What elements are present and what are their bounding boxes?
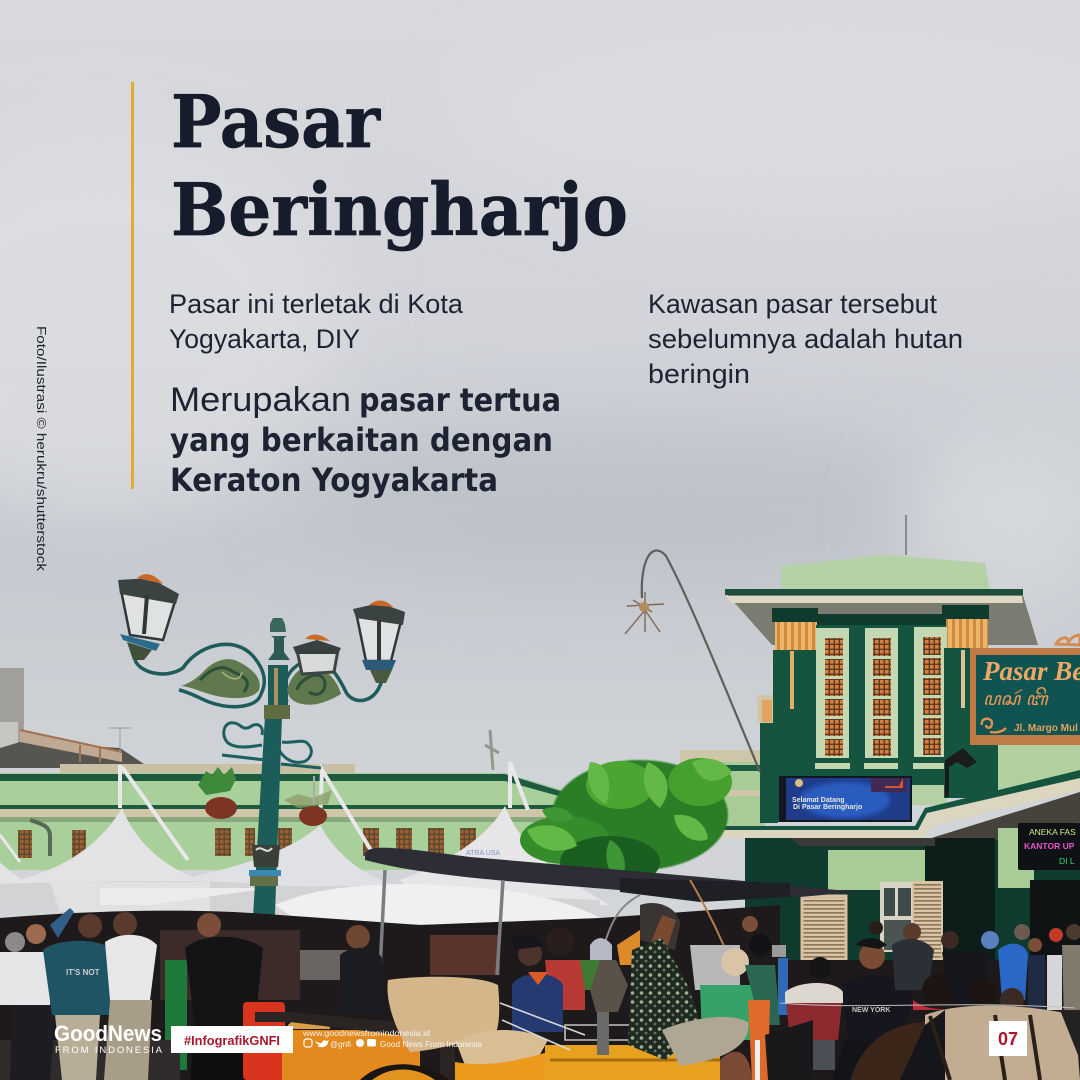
LED shop sign: DI L [1059,856,1075,866]
title: Pasar [171,79,381,164]
logo: GoodNews [54,1021,162,1046]
group of visitors on the left [0,908,157,1080]
page number: 07 [998,1029,1018,1049]
carriage driver [628,903,752,1080]
text block: banyan forest [648,289,963,389]
LED shop sign [1018,823,1080,870]
text block: location: Yogyakarta, DIY [169,324,360,354]
social links: www.goodnewsfromindonesia.id [302,1029,430,1038]
tree [520,758,732,888]
text block: location: Pasar ini terletak di Kota [169,289,464,319]
logo: FROM INDONESIA [55,1045,163,1056]
footer branding [54,1021,1027,1056]
social links [302,1029,483,1049]
social links: @gnfi [330,1040,351,1049]
people [0,908,1080,1080]
market stalls and crowd shadow [0,905,1080,1080]
group of visitors on the left: IT'S NOT [66,968,100,977]
man in black with phone [185,913,263,1080]
street lamp [135,618,383,1000]
title: Beringharjo [171,167,628,252]
people behind carriage [340,916,788,1040]
LED shop sign: ANEKA FAS [1029,827,1076,837]
title [171,79,628,252]
lamp lantern right [353,600,405,683]
text block: banyan forest: beringin [648,359,750,389]
social links: Good News From Indonesia [380,1040,483,1049]
visitors on the right: NEW YORK [852,1007,890,1014]
vest red flag and seat [748,1000,813,1080]
hashtag box: #InfografikGNFI [184,1033,280,1048]
hashtag box [171,1026,293,1053]
page number [989,1021,1027,1056]
horse carriage [243,960,720,1080]
text block: banyan forest: Kawasan pasar tersebut [648,289,937,319]
penjor bamboo pole [625,550,760,772]
LED welcome screen: Selamat Datang [792,797,845,804]
text block: oldest market: Keraton Yogyakarta [170,461,498,499]
building shutters and window [802,882,942,972]
text block: oldest market: Merupakan [170,381,351,419]
LED welcome screen [779,776,912,822]
hanging flower pots [198,767,332,826]
photo credit: Foto/Ilustrasi © herukru/shutterstock [34,326,48,572]
canopy of horse carriage [365,848,856,1050]
LED shop sign: KANTOR UP [1024,841,1075,851]
text block: banyan forest: sebelumnya adalah hutan [648,324,963,354]
accent line [131,82,134,489]
Pasar Beringharjo signboard [970,635,1080,745]
text block: location [169,289,464,354]
low green market building [0,730,580,870]
horse [780,1003,1080,1080]
text block: oldest market [170,381,561,499]
lamp lantern left [118,574,179,660]
Pasar Beringharjo signboard: Jl. Margo Mul [1014,723,1078,734]
Pasar Beringharjo main building [720,555,1080,965]
building behind the tree [680,750,765,835]
antenna [905,515,907,555]
ruined building far left [0,668,150,768]
Pasar Beringharjo signboard: ꦥꦱꦂ ꦧꦼ [983,687,1050,710]
logo [54,1021,163,1056]
white market tents [0,762,610,928]
text block: oldest market: pasar tertua [359,381,561,419]
text block: oldest market: yang berkaitan dengan [170,421,553,459]
white market tents: ATRA USA [466,850,500,857]
LED welcome screen: Di Pasar Beringharjo [793,804,862,811]
visitors on the right [785,921,1080,1080]
